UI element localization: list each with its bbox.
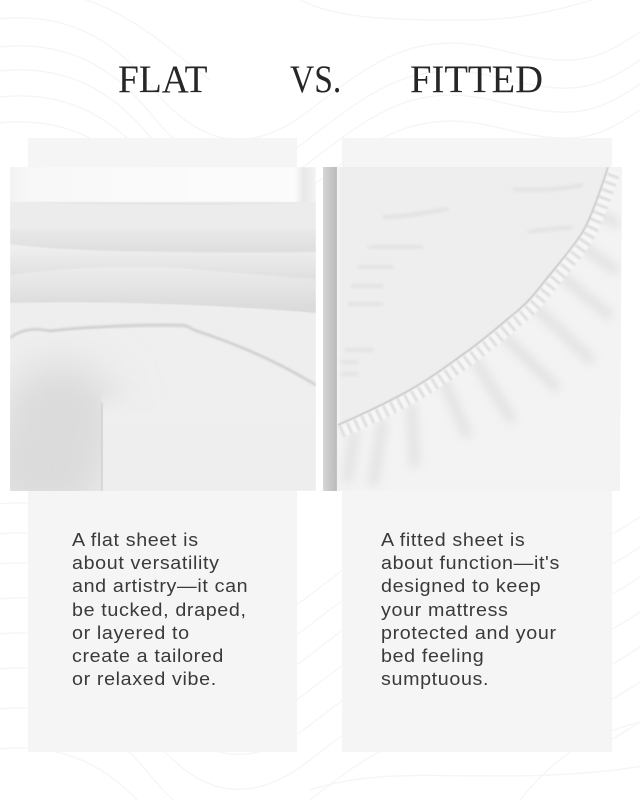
text: flat description: be tucked, draped, — [72, 599, 247, 620]
upper sheet — [338, 167, 608, 425]
heading: FLAT: FLAT — [118, 58, 207, 101]
panel: flat background — [28, 138, 297, 752]
text: flat description: about versatility — [72, 552, 220, 573]
photo: flat sheet on bed — [10, 167, 316, 491]
text: fitted description: bed feeling — [381, 645, 484, 666]
blanket — [10, 328, 316, 394]
text: fitted description: protected and your — [381, 622, 557, 643]
pocket gathers — [347, 212, 619, 485]
side shadow strip — [323, 167, 337, 491]
text: fitted description: your mattress — [381, 599, 509, 620]
lower pocket — [337, 167, 622, 491]
text: flat description — [72, 529, 248, 689]
text: flat description: or layered to — [72, 622, 190, 643]
sheet hem shadow — [10, 325, 316, 385]
heading: VS.: VS. — [290, 58, 341, 101]
text: fitted description — [381, 529, 560, 689]
upper wrinkles — [341, 185, 583, 374]
duvet folds — [19, 202, 316, 386]
text: fitted description: about function—it's — [381, 552, 560, 573]
elastic hem — [338, 167, 615, 432]
text: flat description: A flat sheet is — [72, 529, 199, 550]
headboard — [10, 167, 316, 203]
text: fitted description: designed to keep — [381, 575, 541, 596]
text: fitted description: A fitted sheet is — [381, 529, 525, 550]
text: fitted description: sumptuous. — [381, 668, 489, 689]
fold-over sheet band — [10, 302, 316, 385]
text: flat description: or relaxed vibe. — [72, 668, 217, 689]
blanket corner shading — [10, 360, 108, 433]
photo: fitted sheet corner — [323, 167, 622, 491]
panel: fitted background — [342, 138, 612, 752]
text: flat description: create a tailored — [72, 645, 224, 666]
text: flat description: and artistry—it can — [72, 575, 248, 596]
heading: FITTED: FITTED — [410, 58, 543, 101]
